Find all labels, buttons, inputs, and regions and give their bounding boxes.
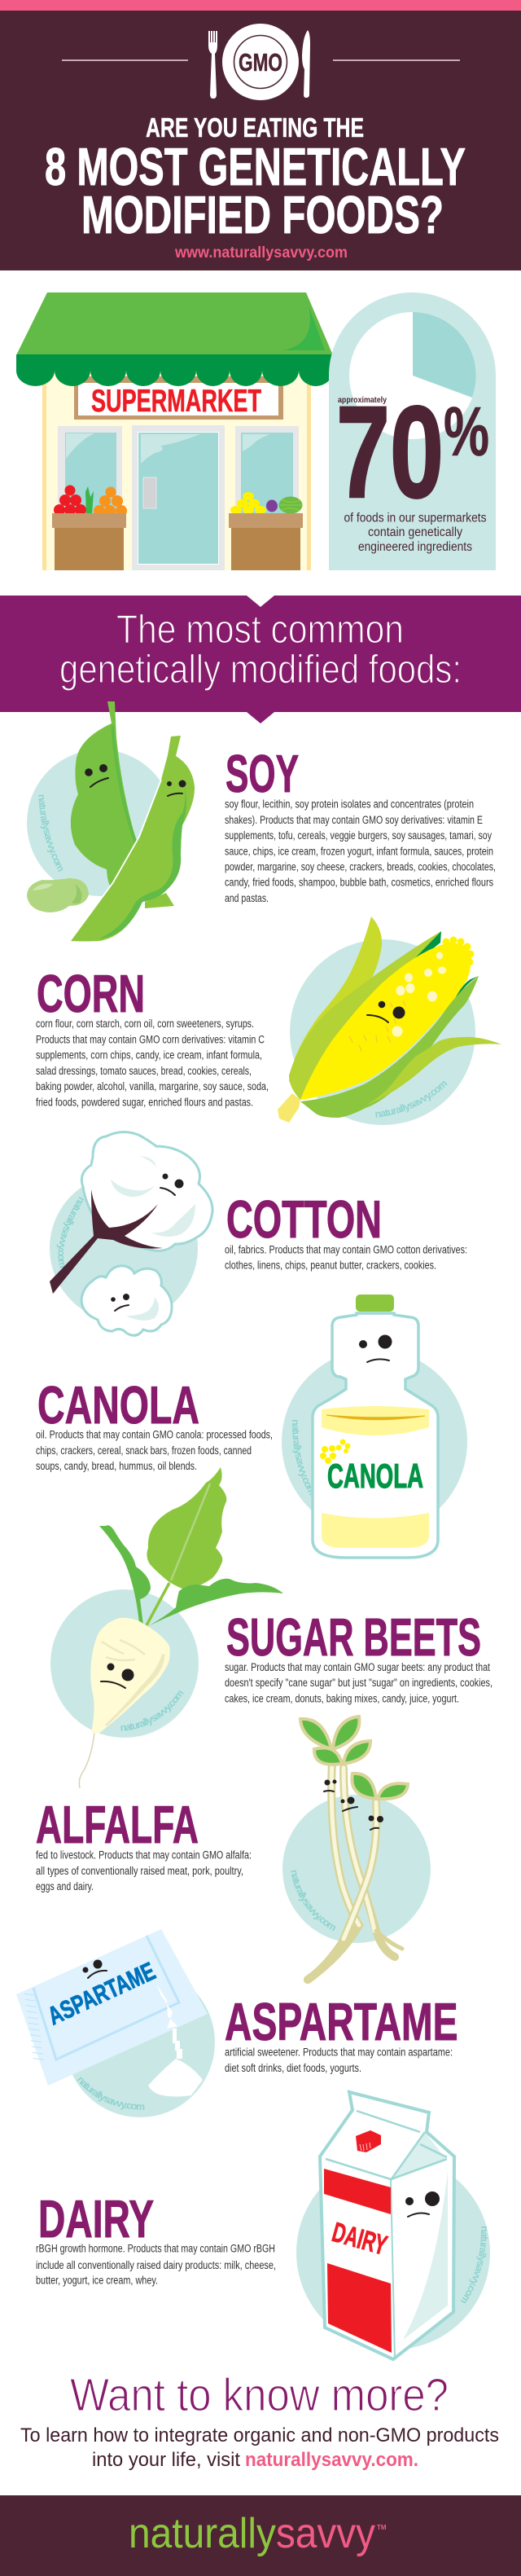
carton side shading bbox=[326, 2111, 448, 2359]
watermark: naturallysavvy.com bbox=[291, 1870, 335, 1931]
website url: www.naturallysavvy.com bbox=[174, 244, 348, 262]
title: ARE YOU EATING THE bbox=[146, 113, 364, 143]
caption: contain genetically bbox=[368, 525, 462, 539]
sprout stems bbox=[308, 1760, 402, 1980]
husk back bbox=[289, 917, 441, 1100]
logo: TM bbox=[377, 2524, 387, 2531]
shop sign bbox=[74, 376, 283, 420]
carton label text: DAIRY bbox=[329, 2217, 391, 2262]
sprout faces bbox=[324, 1779, 383, 1830]
red bands bbox=[324, 2169, 392, 2353]
canola oil bottle illustration bbox=[282, 1295, 467, 1559]
pie chart bbox=[349, 312, 476, 439]
dairy description: butter, yogurt, ice cream, whey. bbox=[36, 2275, 158, 2286]
closing message bbox=[20, 2424, 499, 2471]
soybean bbox=[27, 878, 89, 912]
cotton illustration bbox=[50, 1131, 214, 1337]
milk carton illustration bbox=[296, 2090, 490, 2361]
red spout bbox=[356, 2130, 381, 2152]
sweetener packet bbox=[15, 1929, 208, 2086]
watermark: naturallysavvy.com bbox=[120, 1690, 184, 1731]
carton body bbox=[320, 2092, 454, 2359]
left pod bbox=[71, 701, 138, 888]
right pod bbox=[70, 736, 195, 942]
footer with logo bbox=[0, 2495, 521, 2576]
logo: naturally bbox=[129, 2510, 276, 2557]
canola description bbox=[36, 1429, 273, 1472]
soy heading: SOY bbox=[225, 744, 299, 803]
dairy description: include all conventionally raised dairy products: milk, cheese, bbox=[36, 2259, 276, 2271]
closing message: naturallysavvy.com. bbox=[245, 2449, 418, 2471]
watermark: naturallysavvy.com bbox=[57, 1197, 84, 1268]
aspartame description bbox=[225, 2046, 453, 2074]
section banner bbox=[0, 596, 521, 723]
section banner: The most common bbox=[116, 608, 404, 652]
corn heading: CORN bbox=[37, 964, 145, 1023]
produce: lemons, grapes, melon bbox=[230, 492, 303, 514]
sugar beets description: cakes, ice cream, donuts, baking mixes, candy, juice, yogurt. bbox=[225, 1693, 459, 1704]
corn cob bbox=[300, 937, 474, 1100]
sugar beet illustration bbox=[50, 1467, 283, 1788]
beet root bbox=[79, 1618, 170, 1788]
alfalfa sprouts illustration bbox=[282, 1714, 431, 1984]
left window bbox=[58, 426, 122, 516]
canola description: chips, crackers, cereal, snack bars, frozen foods, canned bbox=[36, 1444, 252, 1457]
back pod tip bbox=[145, 893, 174, 908]
corn description: Products that may contain GMO corn derivatives: vitamin C bbox=[36, 1033, 265, 1046]
watermark: naturallysavvy.com bbox=[38, 795, 63, 872]
shop sign: SUPERMARKET bbox=[91, 384, 261, 419]
aspartame description: diet soft drinks, diet foods, yogurts. bbox=[225, 2062, 361, 2074]
soy description: and pastas. bbox=[225, 892, 269, 904]
corn description bbox=[36, 1018, 269, 1108]
logo bbox=[129, 2510, 387, 2557]
bottle body bbox=[313, 1313, 438, 1558]
oil label bands bbox=[322, 1406, 429, 1548]
title bbox=[45, 113, 466, 244]
corn description: supplements, corn chips, candy, ice cream, infant formula, bbox=[36, 1049, 262, 1061]
large cotton boll bbox=[81, 1132, 212, 1251]
corn illustration bbox=[278, 917, 501, 1125]
label: approximately: approximately bbox=[338, 395, 387, 405]
header banner bbox=[0, 0, 521, 270]
corn description: fried foods, powdered sugar, enriched flours and pastas. bbox=[36, 1097, 253, 1108]
stem bbox=[278, 1093, 300, 1123]
canola flowers bbox=[320, 1439, 350, 1464]
alfalfa description: all types of conventionally raised meat, pork, poultry, bbox=[36, 1865, 243, 1877]
big number: 70 bbox=[336, 379, 444, 525]
cotton description: clothes, linens, chips, peanut butter, crackers, cookies. bbox=[225, 1259, 436, 1271]
cotton branch bbox=[50, 1189, 163, 1294]
dairy description bbox=[36, 2242, 276, 2286]
soy illustration bbox=[27, 701, 195, 942]
watermark: naturallysavvy.com bbox=[292, 1420, 311, 1496]
canola description: oil. Products that may contain GMO canola: processed foods, bbox=[36, 1429, 273, 1440]
bottle face bbox=[359, 1334, 392, 1362]
dairy description: rBGH growth hormone. Products that may contain GMO rBGH bbox=[36, 2242, 275, 2255]
watermark: naturallysavvy.com bbox=[375, 1081, 448, 1118]
closing message: To learn how to integrate organic and non-GMO products bbox=[20, 2424, 499, 2446]
alfalfa heading: ALFALFA bbox=[36, 1795, 199, 1854]
awning bbox=[16, 292, 333, 386]
watermark: naturallysavvy.com bbox=[77, 2077, 145, 2110]
sweetener packet: ASPARTAME bbox=[43, 1957, 160, 2030]
cotton description bbox=[225, 1243, 467, 1271]
produce crates bbox=[52, 513, 303, 570]
corn description: corn flour, corn starch, corn oil, corn sweeteners, syrups. bbox=[36, 1018, 254, 1030]
bottle label text: CANOLA bbox=[327, 1457, 423, 1495]
husk front bbox=[300, 976, 501, 1118]
dairy heading: DAIRY bbox=[38, 2189, 154, 2249]
canola heading: CANOLA bbox=[37, 1375, 199, 1435]
sugar beets description bbox=[225, 1661, 493, 1704]
supermarket illustration bbox=[16, 292, 333, 570]
small cotton boll bbox=[81, 1266, 172, 1335]
panel: 70 percent statistic bbox=[329, 292, 496, 570]
caption bbox=[344, 512, 487, 554]
icon: knife bbox=[302, 30, 310, 98]
closing heading: Want to know more? bbox=[70, 2369, 449, 2421]
produce: tomatoes, greens, oranges bbox=[54, 486, 127, 517]
caption: of foods in our supermarkets bbox=[344, 512, 487, 525]
alfalfa description: fed to livestock. Products that may contain GMO alfalfa: bbox=[36, 1849, 252, 1861]
right window bbox=[235, 426, 299, 516]
big number: % bbox=[444, 393, 489, 471]
door bbox=[132, 425, 225, 570]
cotton heading: COTTON bbox=[226, 1189, 382, 1249]
soy description bbox=[225, 798, 496, 904]
cotton description: oil, fabrics. Products that may contain GMO cotton derivatives: bbox=[225, 1243, 467, 1256]
aspartame description: artificial sweetener. Products that may contain aspartame: bbox=[225, 2046, 453, 2058]
sprout leaves bbox=[300, 1717, 408, 1799]
caption: engineered ingredients bbox=[358, 540, 472, 554]
closing message: into your life, visit bbox=[92, 2449, 240, 2471]
logo: savvy bbox=[276, 2510, 375, 2557]
icon: GMO plate bbox=[222, 24, 299, 100]
icon: GMO plate: GMO bbox=[239, 48, 282, 77]
icon: fork bbox=[208, 31, 217, 99]
beet leaves bbox=[99, 1467, 283, 1626]
watermark: naturallysavvy.com bbox=[461, 2227, 488, 2304]
falling sugar bbox=[148, 2029, 203, 2097]
canola description: soups, candy, bread, hummus, oil blends. bbox=[36, 1460, 197, 1472]
section banner: genetically modified foods: bbox=[59, 648, 462, 692]
alfalfa description: eggs and dairy. bbox=[36, 1880, 94, 1892]
aspartame illustration bbox=[16, 1929, 215, 2117]
corn description: baking powder, alcohol, vanilla, margarine, soy sauce, soda, bbox=[36, 1080, 269, 1092]
alfalfa description bbox=[36, 1849, 252, 1892]
corn description: salad dressings, tomato sauces, bread, cookies, cereals, bbox=[36, 1065, 252, 1077]
carton face bbox=[405, 2191, 440, 2217]
bottle cap bbox=[356, 1295, 394, 1312]
